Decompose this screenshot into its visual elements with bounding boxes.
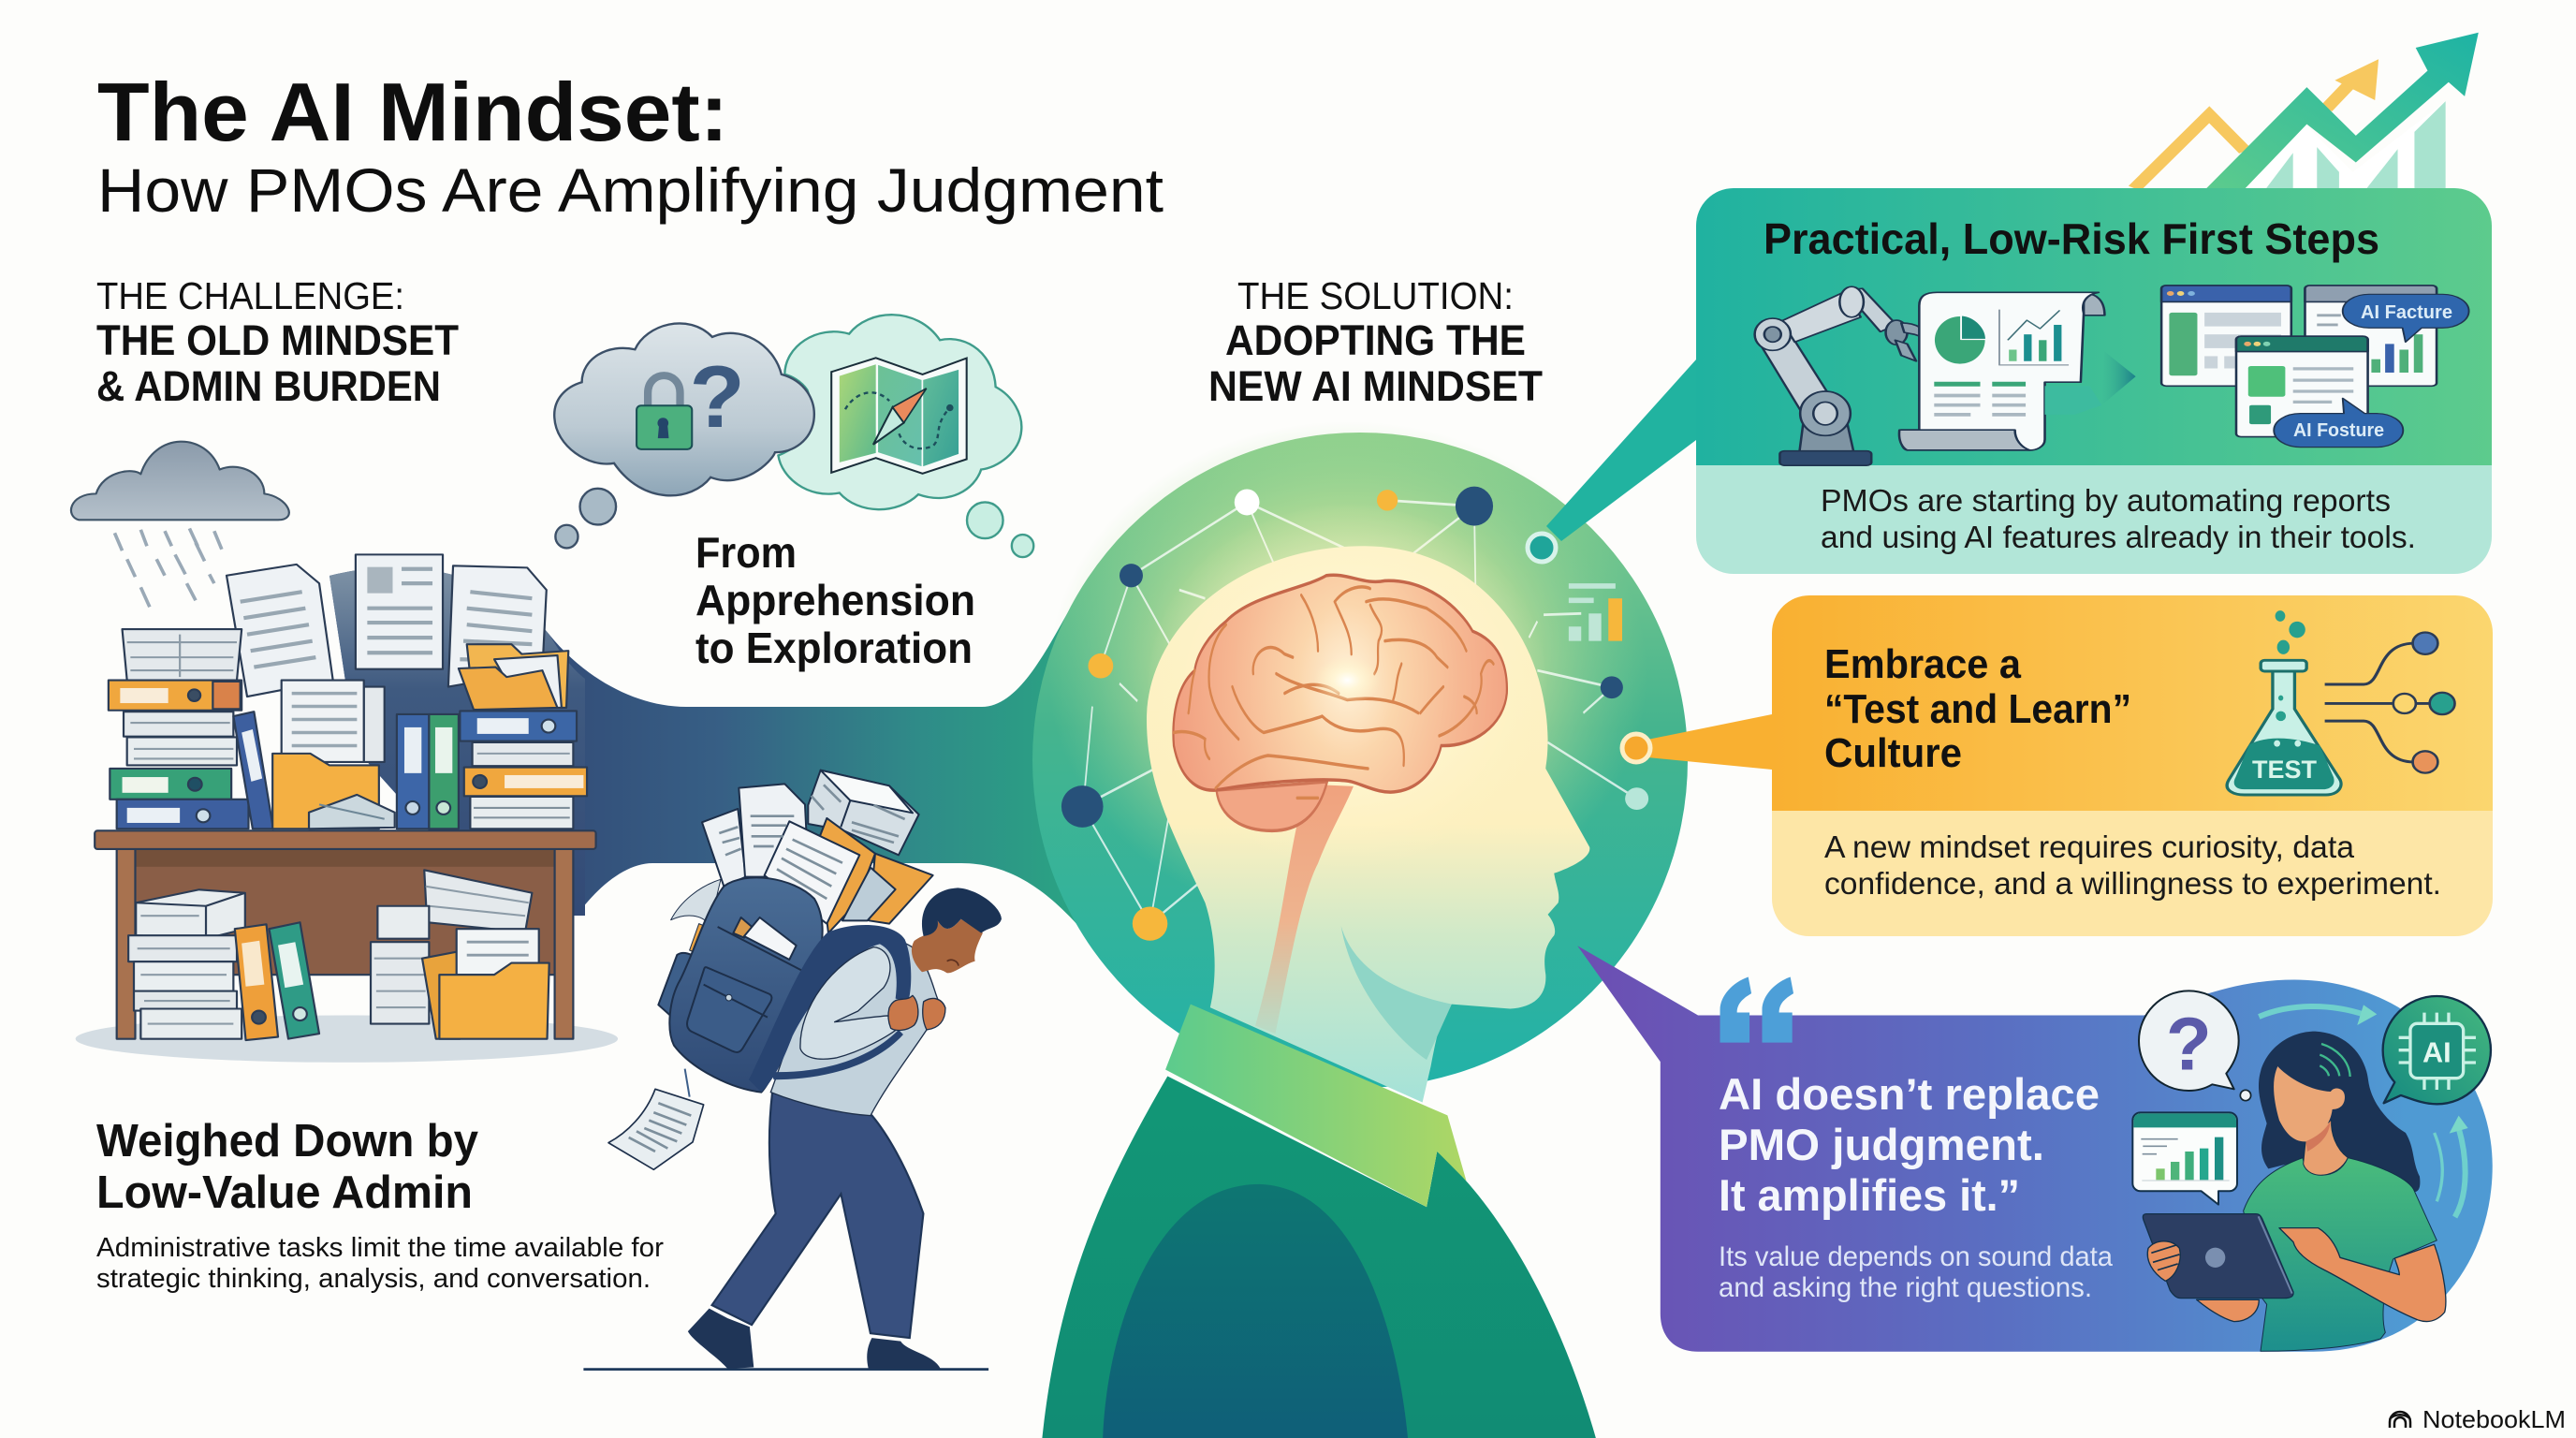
ground line xyxy=(583,1368,988,1372)
floating documents xyxy=(227,554,547,697)
thought clouds xyxy=(554,315,1033,557)
brain highlight xyxy=(1314,656,1381,704)
text block: weighed down: Low-Value Admin xyxy=(96,1167,473,1218)
card footer xyxy=(1696,465,2492,574)
pointer to network node xyxy=(1638,714,1772,770)
right folder and binder stack xyxy=(459,644,587,829)
badge: AI feature top xyxy=(2343,294,2469,342)
panel: practical first steps xyxy=(1546,188,2492,574)
AI chip bubble: AI xyxy=(2422,1036,2452,1068)
shirt xyxy=(2244,1158,2437,1351)
shoes xyxy=(688,1309,941,1369)
arm sleeve xyxy=(800,947,900,1059)
heading: Practical, Low-Risk First Steps xyxy=(1764,214,2379,263)
body copy: confidence, and a willingness to experiment. xyxy=(1824,866,2441,901)
brain xyxy=(1173,575,1507,792)
network node: teal connector xyxy=(1528,534,1556,562)
bars xyxy=(2246,101,2446,188)
body copy xyxy=(1824,829,2441,901)
pointer to network node xyxy=(1546,360,1696,541)
inner arm shape xyxy=(1103,1184,1408,1438)
face xyxy=(2274,1066,2345,1141)
desk xyxy=(95,830,596,1039)
heading: Culture xyxy=(1824,730,1962,776)
heading: Embrace a xyxy=(1824,641,2021,687)
hands xyxy=(888,995,945,1030)
loose paper wing xyxy=(671,879,721,925)
illustration: robot, report and tools xyxy=(1755,286,2469,465)
connecting band from old mindset to head xyxy=(329,567,1123,983)
supporting copy xyxy=(1719,1241,2113,1303)
circular arrows xyxy=(2259,1006,2466,1217)
heading: the solution: ADOPTING THE xyxy=(1225,316,1526,364)
text block: weighed down xyxy=(96,1116,664,1294)
notebooklm mark: NotebookLM xyxy=(2422,1405,2566,1433)
cloud: apprehension xyxy=(554,323,814,548)
hair xyxy=(922,888,1002,936)
cloud: exploration xyxy=(778,315,1033,557)
title: The AI Mindset: xyxy=(97,66,728,158)
text block: apprehension to exploration xyxy=(695,528,975,672)
supporting copy: and asking the right questions. xyxy=(1719,1272,2092,1303)
centre paper pile and folder xyxy=(272,681,459,829)
flask label: TEST xyxy=(2252,756,2317,784)
question bubble: ? xyxy=(2166,1002,2212,1085)
text block: weighed down: Administrative tasks limit the time available for xyxy=(96,1233,664,1263)
band shading behind desk xyxy=(329,567,585,916)
body copy: PMOs are starting by automating reports xyxy=(1821,483,2391,518)
card shape xyxy=(1577,946,2493,1352)
panel: quote on AI and judgment xyxy=(1577,946,2493,1352)
heading: the challenge xyxy=(96,274,459,410)
brain stem xyxy=(1255,785,1354,1034)
icon: opening quote mark xyxy=(1720,977,1793,1043)
old mindset illustration: desk of paperwork xyxy=(71,442,618,1063)
neck shadow xyxy=(1341,926,1452,1060)
network node xyxy=(1622,734,1650,762)
text block: apprehension to exploration: Apprehension xyxy=(695,576,975,624)
small chart icon xyxy=(1569,586,1622,641)
burdened worker with backpack xyxy=(608,770,1002,1169)
quote text xyxy=(1719,1069,2100,1220)
head silhouette xyxy=(1147,546,1589,1102)
tablet xyxy=(2143,1214,2293,1299)
card footer xyxy=(1772,811,2493,936)
body copy: and using AI features already in their tools. xyxy=(1821,520,2416,554)
heading: the challenge: & ADMIN BURDEN xyxy=(96,362,441,410)
overflowing papers and folders xyxy=(702,770,933,933)
heading: “Test and Learn” xyxy=(1824,686,2131,732)
shirt xyxy=(770,938,938,1116)
network lines xyxy=(1082,500,1637,924)
head orb xyxy=(1032,421,1688,1088)
badge label bottom: AI Fosture xyxy=(2293,420,2384,441)
card header xyxy=(1772,595,2493,811)
body copy xyxy=(1821,483,2416,554)
hair xyxy=(2259,1032,2420,1192)
icon: flask and circuit xyxy=(2227,610,2454,795)
lower strap xyxy=(770,1030,903,1079)
badge: AI feature bottom xyxy=(2274,398,2403,448)
supporting copy: Its value depends on sound data xyxy=(1719,1241,2113,1272)
front window xyxy=(2236,336,2368,437)
rain cloud xyxy=(71,442,289,607)
under desk left stack and binders xyxy=(128,889,319,1040)
report document xyxy=(1899,292,2104,450)
network nodes xyxy=(1061,487,1648,941)
AI chip bubble xyxy=(2383,996,2491,1104)
hand on tablet xyxy=(2147,1241,2180,1281)
software windows xyxy=(2161,286,2437,386)
illustration: woman with tablet and AI xyxy=(2132,990,2491,1351)
burdened worker legs xyxy=(583,1093,988,1370)
body copy: A new mindset requires curiosity, data xyxy=(1824,829,2355,864)
torso xyxy=(1042,1076,1596,1438)
falling paper xyxy=(608,1069,704,1169)
badge label top: AI Facture xyxy=(2361,302,2452,323)
panel: test and learn xyxy=(1622,595,2493,936)
heading: the solution xyxy=(1208,274,1543,410)
chart bubble xyxy=(2132,1112,2237,1205)
yellow arrow xyxy=(2134,75,2359,188)
title: How PMOs Are Amplifying Judgment xyxy=(97,155,1164,225)
question bubble xyxy=(2139,990,2251,1101)
icon: padlock xyxy=(637,375,692,449)
card header xyxy=(1696,188,2492,465)
flow arrow xyxy=(2045,386,2101,415)
text block: weighed down: strategic thinking, analysis, and conversation. xyxy=(96,1264,651,1294)
neck xyxy=(2304,1121,2348,1175)
collar xyxy=(1165,1005,1466,1207)
heading: the solution: THE SOLUTION: xyxy=(1237,274,1514,317)
trousers xyxy=(712,1093,923,1338)
under desk right stack and folder xyxy=(371,870,549,1039)
quote text: PMO judgment. xyxy=(1719,1120,2044,1169)
central figure: head, brain and network xyxy=(1042,487,1648,1438)
heading: the challenge: THE CHALLENGE: xyxy=(96,274,404,317)
text block: apprehension to exploration: to Exploration xyxy=(695,624,973,672)
title xyxy=(97,66,1164,225)
icon: question mark: ? xyxy=(689,348,745,447)
cerebellum xyxy=(1217,782,1327,830)
heading: the solution: NEW AI MINDSET xyxy=(1208,362,1543,410)
icon: map and compass xyxy=(831,358,967,474)
text block: weighed down: Weighed Down by xyxy=(96,1116,478,1167)
left paper and binder stack xyxy=(109,629,273,829)
heading: the challenge: THE OLD MINDSET xyxy=(96,316,459,364)
backpack xyxy=(658,877,823,1093)
green arrow xyxy=(2206,33,2479,188)
face xyxy=(912,919,983,973)
floor shadow xyxy=(76,1015,618,1063)
growth arrows above first card xyxy=(2134,33,2479,188)
head signal arcs xyxy=(2320,1044,2350,1077)
backpack strap xyxy=(749,925,911,1093)
heading xyxy=(1824,641,2131,776)
pointing arm xyxy=(2279,1228,2446,1322)
quote text: It amplifies it.” xyxy=(1719,1170,2020,1220)
forearm under tablet xyxy=(2197,1299,2259,1322)
text block: apprehension to exploration: From xyxy=(695,528,797,577)
brain folds xyxy=(1174,587,1494,798)
brain glow xyxy=(1147,504,1548,870)
quote text: AI doesn’t replace xyxy=(1719,1069,2100,1119)
robot arm xyxy=(1755,286,1931,465)
